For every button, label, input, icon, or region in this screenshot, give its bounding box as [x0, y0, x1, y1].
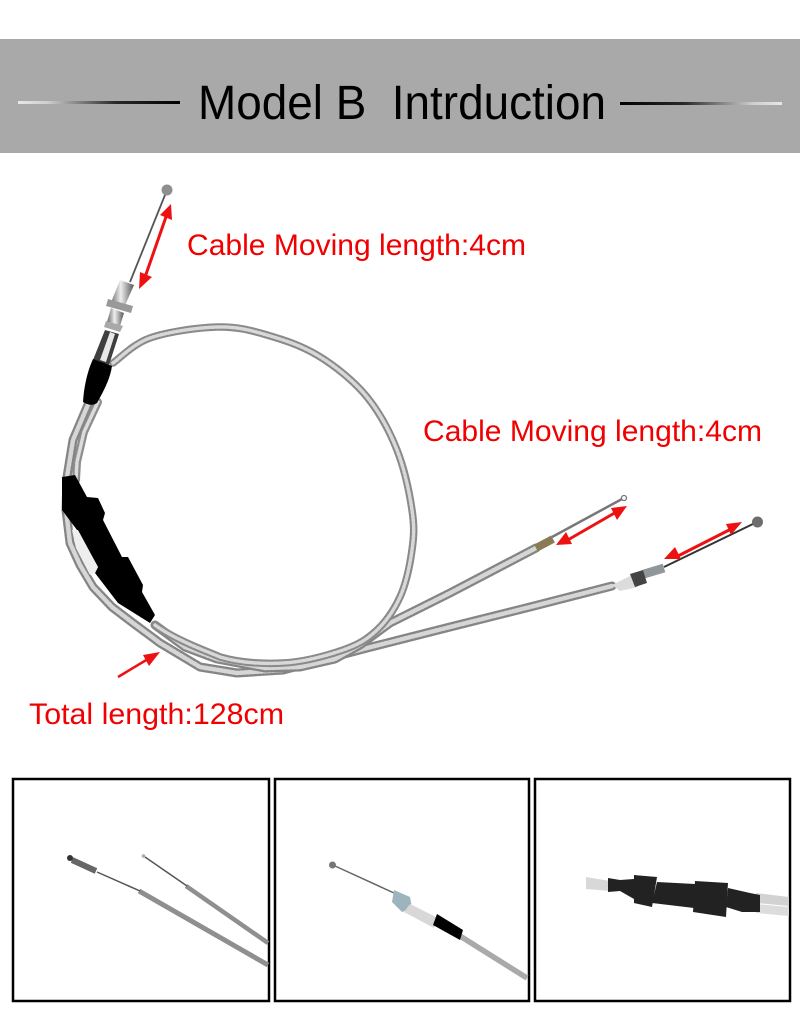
braided cable: lower run from sleeve to lower end — [66, 400, 612, 673]
top cable end fitting — [83, 184, 172, 405]
connector body — [608, 875, 760, 917]
black junction housing — [62, 475, 155, 623]
cable — [460, 936, 527, 978]
right upper cable end — [536, 496, 626, 548]
left cable — [586, 877, 610, 891]
braided cable: upper run to upper end — [155, 548, 536, 668]
arrow: total length — [118, 652, 160, 677]
heading title: Model B Intrduction — [198, 77, 606, 130]
ball end — [329, 862, 336, 868]
wire — [335, 866, 394, 893]
panel: thumbnail black connector — [535, 779, 790, 1001]
nut upper — [106, 299, 133, 313]
right lower cable end — [612, 516, 763, 591]
braided cable: left bundle inner strand — [76, 402, 98, 480]
arrow: top moving length — [139, 204, 172, 289]
arrow: lower right moving length — [664, 522, 742, 559]
main cable photo — [66, 327, 612, 673]
braided cable: large loop — [113, 327, 414, 663]
label: total length: Total length:128cm — [29, 698, 284, 731]
heading line right — [620, 102, 782, 105]
housing highlight — [72, 530, 98, 575]
ferrule — [93, 330, 119, 365]
shaft — [107, 308, 124, 326]
black sleeve — [433, 914, 463, 940]
right cables — [756, 893, 789, 906]
heading line left — [18, 101, 180, 104]
wire — [130, 190, 167, 282]
threaded barrel — [110, 280, 134, 310]
lower cable with fitting — [67, 855, 268, 965]
upper cable with wire — [142, 854, 268, 943]
black sleeve — [83, 359, 112, 405]
ball end — [162, 184, 172, 196]
header band — [0, 39, 800, 153]
label: top cable moving length: Cable Moving length:4cm — [187, 229, 526, 262]
arrow: upper right moving length — [556, 506, 627, 545]
label: right cable moving length: Cable Moving length:4cm — [423, 415, 762, 448]
panel: thumbnail cable ends — [13, 779, 269, 1001]
panel: thumbnail top fitting — [275, 779, 529, 1001]
fitting — [392, 890, 412, 912]
nut lower — [104, 321, 123, 332]
